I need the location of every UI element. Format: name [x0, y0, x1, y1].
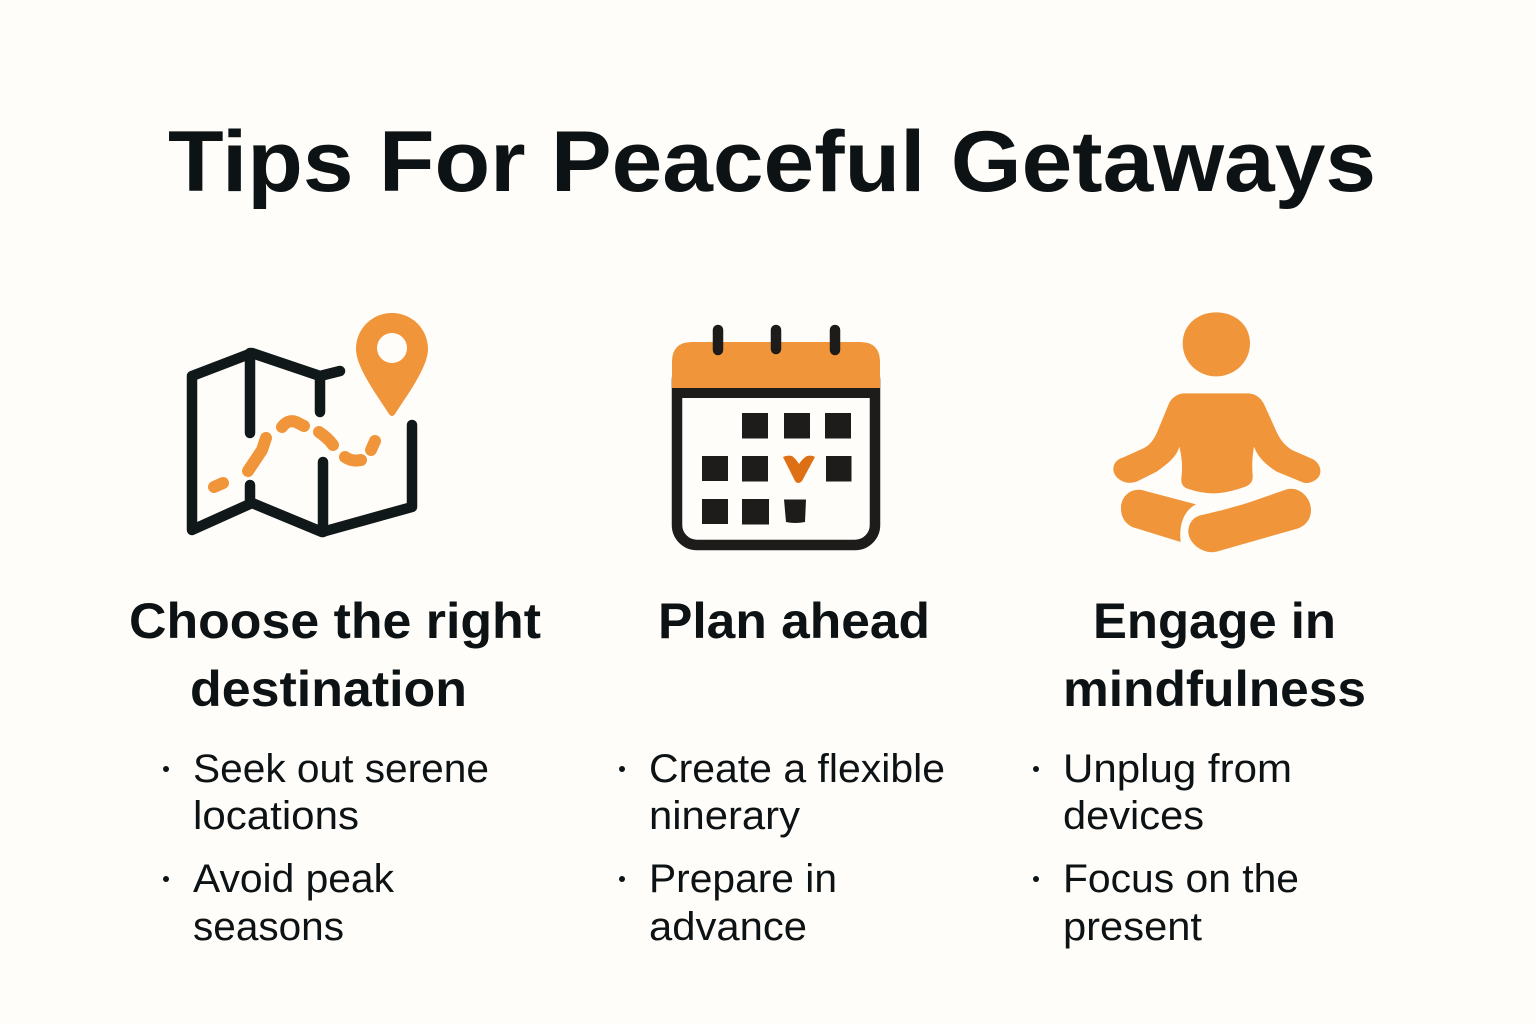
- heading: Plan ahead: [658, 593, 930, 649]
- panel: plan ahead: [619, 330, 945, 949]
- map outline: [192, 353, 412, 532]
- panel: choose the right destination: [129, 313, 541, 949]
- torso and arms: [1113, 393, 1320, 493]
- date squares: [702, 413, 852, 524]
- heading: [129, 593, 541, 717]
- bullet list: locations: [193, 794, 359, 838]
- location pin: [356, 313, 428, 416]
- bullet list: Prepare in: [649, 857, 837, 901]
- left leg: [1121, 490, 1196, 542]
- icon: folded map with route and pin: [192, 313, 428, 532]
- heading: Choose the right: [129, 593, 541, 649]
- heading: [1063, 593, 1366, 717]
- bullet list: seasons: [193, 905, 344, 949]
- icon: meditating person: [1113, 312, 1320, 552]
- bullet list: ninerary: [649, 794, 800, 838]
- bullet list: Avoid peak: [193, 857, 395, 901]
- binder rings: [718, 330, 835, 350]
- heading: mindfulness: [1063, 661, 1366, 717]
- bullet list: Create a flexible: [649, 747, 945, 791]
- bullet list: advance: [649, 905, 807, 949]
- heading: destination: [190, 661, 467, 717]
- right leg: [1188, 489, 1311, 552]
- bullet list: Unplug from: [1063, 747, 1292, 791]
- bullet list: [619, 747, 945, 949]
- calendar header: [672, 342, 880, 388]
- bullet list: devices: [1063, 794, 1204, 838]
- head: [1183, 312, 1250, 376]
- bullet list: Seek out serene: [193, 747, 489, 791]
- icon: calendar: [672, 330, 880, 545]
- heading: Engage in: [1093, 593, 1336, 649]
- calendar body: [677, 360, 875, 545]
- panel: engage in mindfulness: [1033, 312, 1366, 949]
- bullet list: [163, 747, 489, 949]
- bullet list: Focus on the: [1063, 857, 1299, 901]
- bullet list: present: [1063, 905, 1202, 949]
- bullet list: [1033, 747, 1299, 949]
- title: Tips For Peaceful Getaways: [168, 114, 1376, 210]
- highlighted date check: [783, 456, 815, 483]
- dashed route: [214, 421, 375, 487]
